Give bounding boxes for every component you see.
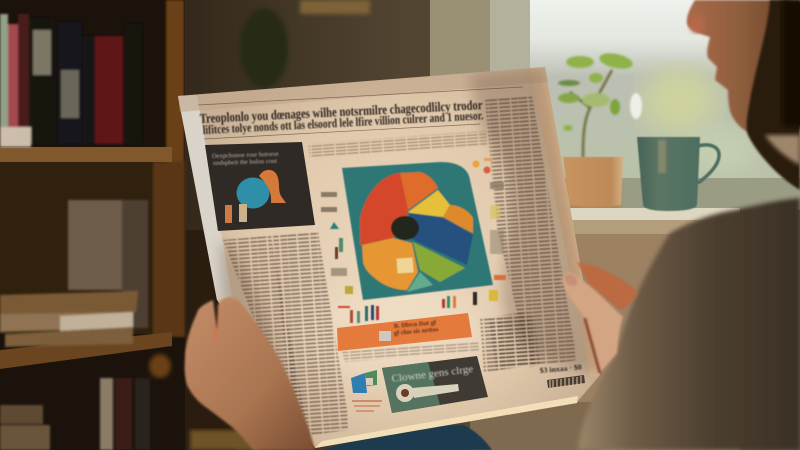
- inset title: ondspheit the hulon cont: [213, 158, 277, 167]
- segment: dark orange: [443, 205, 473, 233]
- inset title: Oexpchonoe rour hutorue: [212, 151, 279, 160]
- paper sheet: [178, 67, 600, 448]
- icon: coffee mug: [637, 137, 719, 211]
- orange banner: B. Dlecn Dat gf: [394, 319, 437, 330]
- headline: Treoplonlo you dœnages wilhe notsrmilre chagecodlilcy trodor: [199, 97, 483, 126]
- pale square: [397, 257, 414, 274]
- bookshelf: [0, 0, 185, 450]
- side icons around pie: [321, 158, 506, 294]
- headline: lifitces tolye nonds ott las elsoord lele lfire villion culrer and 1 nuesor.: [202, 108, 484, 137]
- headline: [199, 97, 484, 137]
- segment: red: [360, 173, 408, 245]
- potted plant: [558, 51, 642, 207]
- left hand: [185, 298, 315, 450]
- barcode: $3 inxaa · $0: [539, 363, 583, 375]
- inset circle: [236, 178, 270, 208]
- books on lower shelf: [0, 354, 171, 450]
- icon: terracotta pot: [563, 157, 623, 207]
- hanging plant: [240, 0, 370, 88]
- pie centre: [391, 216, 419, 240]
- background: wall and window: [185, 0, 800, 450]
- books on upper shelf: [0, 14, 142, 147]
- central pie infographic: [342, 162, 493, 300]
- inset chart: dark panel: [205, 142, 315, 231]
- barcode: [539, 363, 585, 388]
- segment: lower orange: [362, 238, 418, 290]
- pie background: [342, 162, 493, 300]
- inset bars: [225, 205, 232, 223]
- person: face and hair: [687, 0, 800, 190]
- segment: pale teal: [407, 272, 433, 292]
- green banner: Clowne gens clrge: [391, 364, 474, 385]
- orange banner: [337, 313, 472, 351]
- icon: blue and green puzzle: [351, 370, 382, 412]
- person: shoulder in grey sweater: [578, 198, 800, 450]
- body text columns: [223, 96, 577, 436]
- segment: yellow: [408, 190, 450, 217]
- shadow across paper: [470, 67, 600, 375]
- right hand: [562, 262, 638, 373]
- segment: green: [413, 242, 465, 282]
- segment: orange: [400, 172, 438, 210]
- inset silhouette: [259, 170, 286, 203]
- newspaper: [178, 67, 600, 448]
- green banner: [382, 356, 488, 413]
- small people and bars row: [338, 290, 498, 323]
- headline rules: [198, 87, 523, 139]
- inset title: [212, 151, 279, 167]
- orange banner: gf clus sis nrttos: [394, 326, 439, 337]
- icon: plant leaves: [558, 51, 642, 158]
- lap: blue jeans: [323, 425, 492, 450]
- pill with target icon: [412, 384, 459, 398]
- books on middle shelf: [0, 200, 148, 347]
- segment: blue: [405, 213, 473, 265]
